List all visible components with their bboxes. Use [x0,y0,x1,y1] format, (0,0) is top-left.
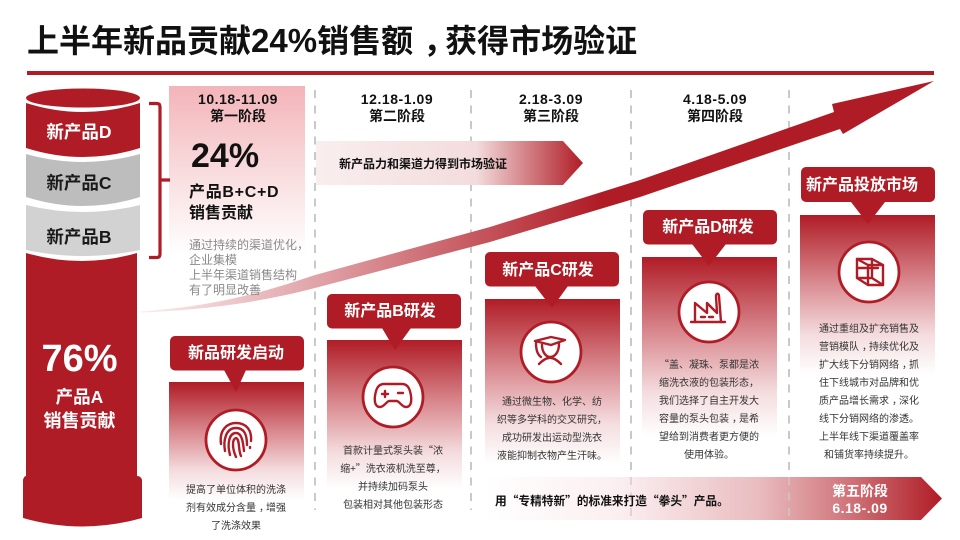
icon: fingerprint [206,410,266,470]
description: 望给到消费者更方便的 [659,428,759,443]
description: 使用体验。 [684,446,734,461]
cylinder: new product C: 新产品C [46,173,112,193]
description: 上半年线下渠道覆盖率 [819,428,919,443]
stage three heading: 第三阶段 [523,108,579,124]
card: new product development start [169,336,304,532]
label: 新产品B研发 [344,301,436,320]
cylinder: 76 percent label [41,338,118,431]
stage one text: 上半年渠道销售结构 [189,267,297,282]
bottom arrow: 用“专精特新”的标准来打造“拳头”产品。 [495,492,729,509]
stage two heading: 12.18-1.09 [361,91,433,107]
label: 新产品投放市场 [806,175,918,194]
cylinder: new product C [26,154,140,206]
description: 首款计量式泵头装“浓 [343,442,443,457]
icon: game controller [363,367,423,427]
top arrow: 新产品力和渠道力得到市场验证 [339,156,507,171]
panel: stage one background [169,86,305,256]
stage two heading [361,91,433,124]
description: 液能抑制衣物产生汗味。 [497,447,607,462]
label [170,336,304,392]
cylinder: new product B: 新产品B [46,227,112,247]
description: 织等多学科的交叉研究， [497,411,607,426]
icon: cube [839,242,899,302]
stage four heading [683,91,747,124]
card: market launch [800,167,935,461]
description: 质产品增长需求 ，深化 [819,392,919,407]
description: 包装相对其他包装形态 [343,496,443,511]
cylinder: new product D [26,88,140,157]
stage three heading: 2.18-3.09 [519,91,583,107]
description [186,481,286,532]
bracket [149,104,170,258]
description: 扩大线下分销网络 ，抓 [819,356,919,371]
cylinder chart [23,88,142,526]
description: 线下分销网络的渗透。 [819,410,919,425]
description [340,442,446,511]
stage four heading: 4.18-5.09 [683,91,747,107]
label: 新产品D研发 [662,217,754,236]
card: new product D [642,210,777,461]
stage one text [189,91,309,297]
cylinder: 76 percent label: 销售贡献 [44,411,116,431]
stage two heading: 第二阶段 [369,108,425,124]
description: 营销模队 ，持续优化及 [819,338,919,353]
label: 新品研发启动 [188,343,284,362]
stage three heading [519,91,583,124]
bottom arrow: 6.18-.09 [832,500,888,516]
title: 上半年新品贡献24%销售额 ，获得市场验证 [27,16,637,62]
card: new product C [485,252,620,464]
stage one text: 有了明显改善 [189,282,261,297]
stage one text: 企业集模 [189,252,237,267]
stage one text: 通过持续的渠道优化， [189,237,309,252]
label [485,252,619,308]
cylinder: new product D: 新产品D [46,122,112,142]
label [801,167,935,224]
icon: graduate [521,322,581,382]
description: 缩+”洗衣液机洗至尊， [340,460,446,475]
description: 通过微生物、化学、纺 [502,393,602,408]
cylinder: new product B [26,205,140,256]
description: 住下线城市对品牌和优 [819,374,919,389]
stage one text: 销售贡献 [189,203,253,222]
description: 我们选择了自主开发大 [659,392,759,407]
bottom arrow [485,477,942,520]
description [819,320,919,461]
description: 剂有效成分含量 ，增强 [186,499,286,514]
big growth arrow [140,81,934,312]
description: 缩洗衣液的包装形态， [659,374,759,389]
description: 了洗涤效果 [211,517,261,532]
label: 新产品C研发 [502,260,594,279]
description: 成功研发出运动型洗衣 [502,429,602,444]
bottom arrow: 第五阶段 [832,483,888,499]
description: “盖、凝珠、泵都是浓 [659,356,759,371]
label [327,294,461,350]
card: new product B [327,294,462,511]
description: 容量的泵头包装 ，是希 [659,410,759,425]
description [659,356,759,461]
stage one text: 10.18-11.09 [198,91,278,107]
description: 和铺货率持续提升。 [824,446,914,461]
description: 并持续加码泵头 [358,478,428,493]
stage one text: 24% [191,137,259,175]
cylinder: product A body [23,253,142,526]
description: 通过重组及扩充销售及 [819,320,919,335]
title rule [27,71,934,75]
icon: factory [679,282,739,342]
stage one text: 第一阶段 [210,108,266,124]
top arrow [316,141,583,185]
stage four heading: 第四阶段 [687,108,743,124]
description: 提高了单位体积的洗涤 [186,481,286,496]
cylinder: 76 percent label: 76% [41,338,118,380]
cylinder: 76 percent label: 产品A [56,387,104,407]
label [643,210,777,266]
stage one text: 产品B+C+D [189,183,279,201]
description [497,393,607,462]
